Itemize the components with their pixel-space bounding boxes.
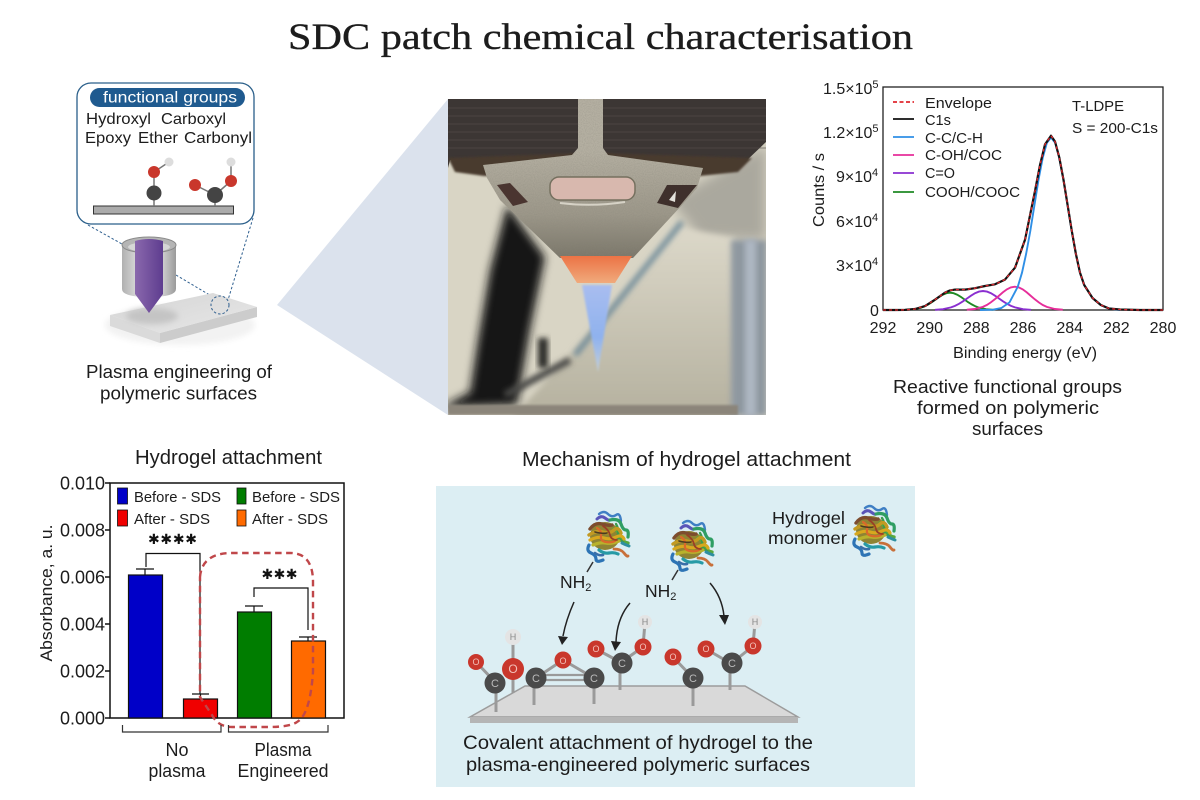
caption: reactive functional groups: formed on polymeric: [917, 397, 1099, 418]
caption: reactive functional groups: surfaces: [972, 418, 1043, 439]
heading: hydrogel attachment: Hydrogel attachment: [135, 447, 322, 469]
photo: plasma jet nozzle: [440, 99, 767, 420]
caption: reactive functional groups: Reactive functional groups: [893, 376, 1122, 397]
plot frame: [883, 87, 1163, 310]
pill heading: functional groups: [103, 90, 237, 106]
y axis labels: [60, 474, 105, 728]
chart: XPS C1s spectrum: [811, 79, 1176, 362]
atoms: carbonyl right: C: [689, 673, 697, 685]
y axis labels: 0.000: [60, 708, 105, 728]
significance bracket: plasma engineered: [254, 567, 308, 630]
y axis labels: 1.2×10: [823, 125, 872, 142]
y axis labels: 4: [872, 212, 878, 224]
legend: Before - SDS: [134, 489, 221, 506]
x axis title: Binding energy (eV): [953, 345, 1097, 362]
curve: envelope: [883, 136, 1163, 310]
chart: absorbance bars: [38, 474, 344, 781]
zoom connector lines: [88, 218, 253, 300]
legend: [893, 95, 1020, 201]
legend: C1s: [925, 112, 951, 129]
caption: reactive functional groups: [893, 376, 1122, 439]
molecule sticks: [476, 622, 755, 712]
icon: protein monomer 2: [672, 521, 713, 580]
icon: protein monomer 1: [587, 512, 629, 572]
y axis labels: 0.002: [60, 662, 105, 682]
bar: plasma after SDS: [292, 641, 326, 718]
atoms: carboxyl right: O: [702, 644, 710, 654]
hydrogel monomer key: [768, 506, 895, 555]
bar: no plasma after SDS: [184, 699, 218, 718]
legend: After - SDS: [134, 511, 210, 528]
y axis labels: 0.004: [60, 614, 105, 634]
atoms: carboxyl left: O: [592, 644, 600, 654]
x axis labels: 290: [916, 320, 943, 337]
sample annotation: S = 200-C1s: [1072, 120, 1158, 137]
callout: functional groups: [77, 83, 254, 224]
label: NH2 left: 2: [585, 582, 591, 594]
caption: [463, 732, 813, 776]
axes frame: [105, 483, 344, 718]
y axis labels: 3×10: [836, 258, 872, 275]
atoms: carboxyl right: H: [752, 617, 758, 627]
y axis labels: 0: [870, 303, 879, 320]
y axis labels: 0.010: [60, 474, 105, 494]
atoms: carbonyl and hydroxyl: O: [508, 662, 518, 676]
atoms: carbonyl and hydroxyl: O: [472, 657, 480, 667]
atoms: epoxy: O: [559, 656, 567, 666]
bar: no plasma before SDS: [128, 575, 162, 718]
atoms: carbonyl right: [664, 648, 704, 688]
y axis labels: 6×10: [836, 214, 872, 231]
y axis labels: 0.008: [60, 520, 105, 540]
arrow: to epoxy: [558, 602, 574, 645]
icon: plasma nozzle: [122, 237, 176, 313]
arrow: to carboxyl right: [710, 583, 729, 625]
significance bracket: plasma engineered: ✱✱✱: [262, 567, 298, 583]
x axis labels: 280: [1150, 320, 1176, 337]
x axis labels: 286: [1010, 320, 1036, 337]
panel: mechanism of hydrogel attachment: [436, 486, 915, 787]
curve: C-OH/COC: [967, 287, 1063, 310]
atoms: carboxyl right: C: [728, 658, 736, 670]
legend: Before - SDS: [252, 489, 340, 506]
functional group names: Ether: [138, 130, 179, 147]
group labels: [148, 740, 328, 781]
legend: COOH/COOC: [925, 184, 1020, 201]
significance bracket: no plasma: [146, 532, 200, 694]
functional group names: Hydroxyl: [86, 111, 151, 128]
x axis labels: [870, 320, 1176, 337]
error bars: [136, 569, 317, 699]
group labels: No: [165, 740, 189, 760]
projection triangle: [277, 99, 448, 415]
caption: Covalent attachment of hydrogel to the: [463, 732, 813, 754]
functional group names: Carbonyl: [184, 130, 252, 147]
legend: C-OH/COC: [925, 147, 1002, 164]
atoms: carboxyl right: [698, 615, 762, 674]
legend: C=O: [925, 165, 955, 182]
y axis title: Absorbance, a. u.: [38, 524, 56, 662]
label: NH2 right: 2: [670, 591, 676, 603]
dashed highlight outline: [200, 553, 313, 727]
y axis labels: 5: [872, 79, 879, 91]
polymer surface: [470, 686, 798, 723]
group labels: Plasma: [254, 740, 312, 760]
caption: polymeric surfaces: [100, 382, 257, 404]
arrow: to carboxyl left: [611, 603, 630, 651]
curve: C1s: [883, 136, 1163, 310]
functional group names: [85, 111, 252, 147]
group brackets: [122, 725, 328, 732]
caption: Plasma engineering of: [86, 361, 273, 382]
icon: polymer slab: [105, 293, 257, 345]
molecule: hydroxyl: [146, 158, 174, 206]
atoms: epoxy: C: [532, 673, 540, 685]
atoms: carbonyl and hydroxyl: [468, 629, 524, 694]
x axis labels: 292: [870, 320, 896, 337]
label: NH2 right: NH: [645, 581, 670, 601]
heading: mechanism: Mechanism of hydrogel attachment: [522, 449, 851, 471]
molecule: carboxyl: [189, 158, 237, 206]
surface bar: [94, 206, 234, 214]
title: SDC patch chemical characterisation: [288, 17, 913, 58]
y axis labels: 4: [872, 256, 878, 268]
legend: [118, 488, 340, 528]
y axis labels: 1.5×10: [823, 81, 872, 98]
functional group names: Epoxy: [85, 130, 131, 147]
atoms: epoxy: [526, 652, 604, 688]
y axis labels: [823, 79, 879, 320]
legend: After - SDS: [252, 511, 328, 528]
caption: [86, 361, 273, 404]
significance bracket: no plasma: ✱✱✱✱: [148, 532, 197, 548]
hydrogel monomer key: monomer: [768, 528, 847, 548]
x axis labels: 284: [1056, 320, 1083, 337]
atoms: carbonyl right: O: [669, 652, 677, 662]
group labels: plasma: [148, 761, 206, 781]
y axis labels: 5: [872, 123, 879, 135]
panel: plasma engineering schematic: [77, 83, 273, 404]
curve: C=O: [935, 291, 1031, 310]
y axis labels: 9×10: [836, 169, 872, 186]
bar: plasma before SDS: [238, 612, 272, 718]
sample annotation: [1072, 98, 1158, 137]
hydrogel monomer key: Hydrogel: [772, 508, 845, 528]
atoms: epoxy: C: [590, 673, 598, 685]
zoom circle: [211, 296, 229, 314]
atoms: carbonyl and hydroxyl: C: [491, 678, 499, 690]
caption: plasma-engineered polymeric surfaces: [466, 754, 810, 776]
atoms: carboxyl right: O: [749, 641, 757, 651]
y axis labels: 4: [872, 167, 878, 179]
curve: C-C/C-H: [980, 138, 1120, 310]
y axis labels: 0.006: [60, 568, 105, 588]
x axis labels: 288: [963, 320, 990, 337]
functional group names: Carboxyl: [161, 111, 226, 128]
legend: C-C/C-H: [925, 130, 983, 147]
group labels: Engineered: [238, 761, 328, 781]
curve: COOH/COOC: [906, 293, 994, 310]
label: NH2 left: NH: [560, 572, 585, 592]
y axis title: Counts / s: [811, 153, 828, 227]
sample annotation: T-LDPE: [1072, 98, 1124, 115]
atoms: carboxyl left: H: [642, 617, 648, 627]
x axis labels: 282: [1103, 320, 1130, 337]
legend: Envelope: [925, 95, 992, 112]
atoms: carboxyl left: [588, 615, 652, 674]
atoms: carbonyl and hydroxyl: H: [510, 632, 516, 642]
atoms: carboxyl left: O: [639, 642, 647, 652]
atoms: carboxyl left: C: [618, 658, 626, 670]
